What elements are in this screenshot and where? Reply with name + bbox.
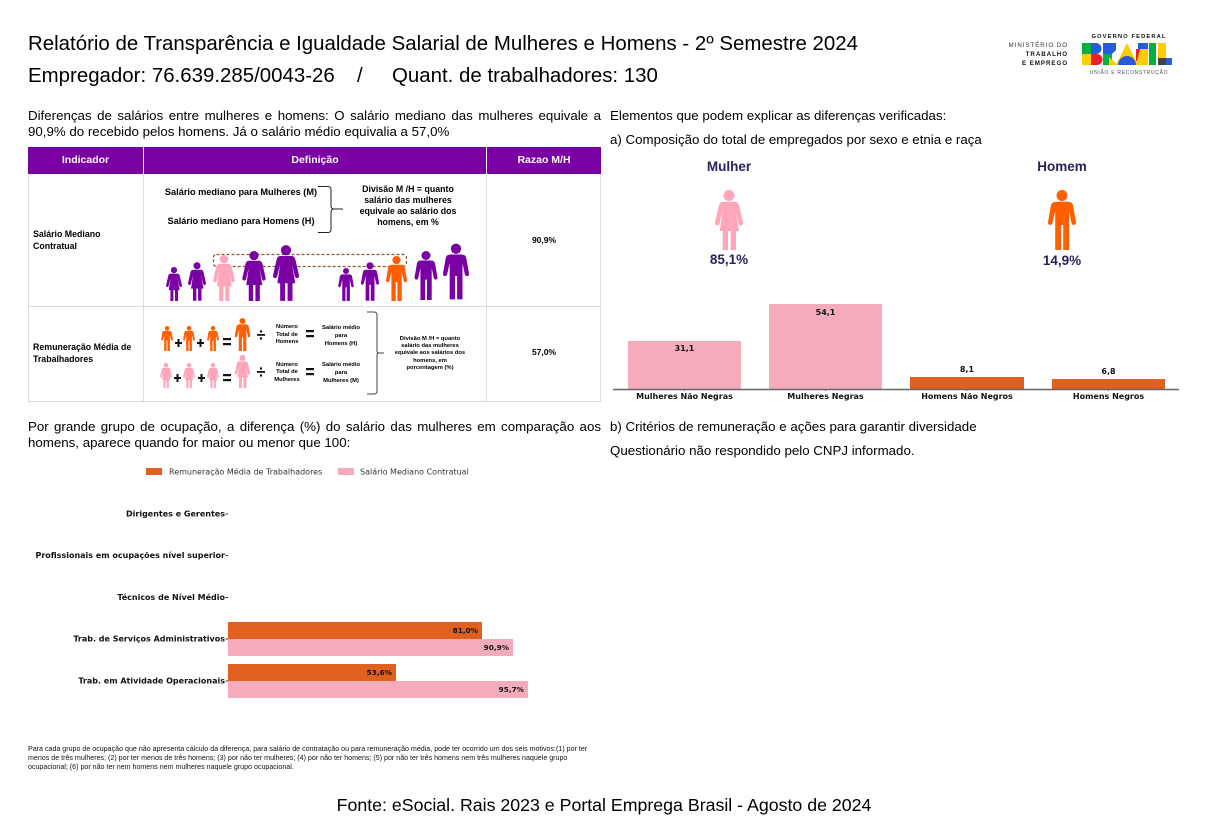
bar chart: occupation groups: 95,7% (499, 685, 525, 694)
definition: median salary formula: Salário mediano para Homens (H) (167, 216, 315, 226)
definition: average pay formula: Total de (276, 332, 298, 338)
definition: median salary formula: homens, em % (377, 216, 439, 226)
table header: Definição (291, 154, 339, 166)
logo: Ministério do Trabalho e Emprego: E EMPREGO (1022, 60, 1068, 67)
definition: average pay formula: para (335, 370, 347, 376)
bar chart: composition by sex and race (613, 304, 1179, 401)
bar chart: composition by sex and race: 6,8 (1101, 367, 1116, 376)
definition: average pay formula: Mulheres (274, 377, 300, 383)
section text: occupation groups: Por grande grupo de ocupação, a diferença (%) do salário das mulheres em comparação aos (28, 419, 601, 434)
row label: Remuneração Média de Trabalhadores: Remuneração Média de (33, 342, 131, 352)
bar chart: occupation groups: Dirigentes e Gerentes (126, 510, 225, 518)
section heading: explanatory elements (610, 108, 982, 147)
logo: Ministério do Trabalho e Emprego: TRABALHO (1026, 51, 1068, 58)
logo: Ministério do Trabalho e Emprego: MINISTÉRIO DO (1009, 42, 1068, 49)
definition: median salary formula (165, 184, 456, 233)
bar chart: composition by sex and race: Homens Não Negros (921, 392, 1013, 401)
title: Empregador: 76.639.285/0043-26 (28, 64, 335, 87)
bar chart: composition by sex and race: 54,1 (816, 308, 836, 317)
section text: remuneration criteria: Questionário não respondido pelo CNPJ informado. (610, 443, 915, 458)
panel: Homem share: 14,9% (1043, 253, 1081, 268)
footnote (28, 745, 587, 771)
footnote: ocupacional; (6) por não ter nem homens nem mulheres naquele grupo ocupacional. (28, 763, 294, 771)
definition: median salary formula: equivale ao salário dos (360, 206, 456, 216)
panel: Mulher share: Mulher (707, 159, 751, 174)
bar chart: occupation groups: Técnicos de Nível Médio (117, 592, 225, 602)
bar chart: occupation groups: Trab. em Atividade Operacionais (78, 676, 225, 686)
definition: average pay formula: Mulheres (M) (323, 378, 359, 384)
bar chart: occupation groups: 81,0% (453, 626, 479, 635)
logo: Ministério do Trabalho e Emprego (1009, 41, 1068, 67)
row label: Salário Mediano Contratual: Salário Mediano (33, 229, 100, 239)
definition: median salary formula: Salário mediano para Mulheres (M) (165, 187, 317, 197)
table header: Indicador (62, 154, 109, 166)
intro text: salary difference (28, 108, 602, 139)
title: / (357, 64, 363, 87)
definition: median salary formula: Divisão M /H = quanto (362, 184, 454, 194)
bar chart: occupation groups: 90,9% (484, 643, 510, 652)
legend (146, 466, 469, 476)
section heading: explanatory elements: Elementos que podem explicar as diferenças verificadas: (610, 108, 946, 123)
section text: occupation groups: homens, aparece quando for maior ou menor que 100: (28, 435, 350, 450)
section text: occupation groups (28, 419, 601, 450)
definition: average pay formula: homens, em (413, 358, 447, 364)
operators (174, 330, 314, 382)
panel: Homem share: Homem (1037, 159, 1087, 174)
table header (62, 154, 571, 166)
panel: Mulher share (707, 159, 751, 267)
definition: average pay formula: para (335, 333, 347, 339)
panel: Homem share (1037, 159, 1087, 268)
definition: median salary formula: salário das mulheres (364, 194, 452, 204)
bar chart: occupation groups: Profissionais em ocupações nível superior (35, 551, 225, 560)
definition: average pay formula: equivale aos salários dos (395, 350, 465, 356)
value: 57,0%: 57,0% (532, 347, 556, 357)
logo: Governo Federal Brasil (1082, 34, 1172, 76)
definition: average pay formula: Homens (H) (325, 341, 357, 347)
row label: Remuneração Média de Trabalhadores: Trabalhadores (33, 354, 93, 364)
bar chart: composition by sex and race: Homens Negros (1073, 392, 1144, 401)
icon row: people in order of salary (166, 244, 469, 301)
definition: average pay formula (160, 312, 465, 394)
definition: average pay formula: Total de (276, 369, 298, 375)
section text: remuneration criteria (610, 419, 977, 458)
section text: remuneration criteria: b) Critérios de remuneração e ações para garantir diversidade (610, 419, 977, 434)
legend: Salário Mediano Contratual (360, 468, 469, 476)
table header: Razao M/H (517, 154, 571, 166)
bar chart: composition by sex and race: Mulheres Negras (787, 392, 864, 401)
row label: Remuneração Média de Trabalhadores (33, 342, 131, 364)
panel: Mulher share: 85,1% (710, 252, 748, 267)
footnote: Para cada grupo de ocupação que não apresenta cálculo da diferença, para salário de contratação ou para remuneração média, pode ter ocorrido um dos seis motivos:(1) por ter (28, 745, 587, 753)
row label: Salário Mediano Contratual: Contratual (33, 241, 77, 251)
title: Quant. de trabalhadores: 130 (392, 64, 658, 87)
row label: Salário Mediano Contratual (33, 229, 100, 251)
definition: average pay formula: Salário médio (322, 362, 360, 368)
bar chart: composition by sex and race: Mulheres Não Negras (636, 392, 733, 401)
bar chart: composition by sex and race: 31,1 (675, 344, 695, 353)
legend: Remuneração Média de Trabalhadores (169, 466, 322, 476)
definition: average pay formula: Número (276, 324, 298, 330)
definition: average pay formula: Divisão M /H = quanto (400, 336, 460, 342)
footnote: menos de três mulheres; (2) por ter menos de três homens; (3) por não ter mulheres; (4) por não ter homens; (5) por não ter três homens nem três mulheres naquele grupo (28, 754, 567, 762)
bar chart: occupation groups: 53,6% (367, 668, 393, 677)
panel: indicator table (28, 147, 601, 402)
bar chart: occupation groups: Trab. de Serviços Administrativos (73, 634, 225, 644)
bar chart: occupation groups (35, 466, 528, 698)
definition: average pay formula: Salário médio (322, 325, 360, 331)
value: 90,9%: 90,9% (532, 235, 556, 245)
logo: Governo Federal Brasil: GOVERNO FEDERAL (1091, 34, 1167, 40)
definition: average pay formula: Homens (276, 339, 298, 345)
bar chart: composition by sex and race: 8,1 (960, 365, 975, 374)
definition: average pay formula: porcentagem (%) (406, 365, 454, 371)
intro text: salary difference: 90,9% do recebido pelos homens. Já o salário médio equivalia a 57,0% (28, 124, 449, 139)
section heading: explanatory elements: a) Composição do total de empregados por sexo e etnia e raça (610, 132, 982, 147)
title: Relatório de Transparência e Igualdade Salarial de Mulheres e Homens - 2º Semestre 2024 (28, 32, 858, 55)
definition: average pay formula: Número (276, 362, 298, 368)
definition: average pay formula: salário das mulheres (401, 343, 459, 349)
source line: Fonte: eSocial. Rais 2023 e Portal Emprega Brasil - Agosto de 2024 (337, 795, 871, 815)
intro text: salary difference: Diferenças de salários entre mulheres e homens: O salário mediano das mulheres equivale a (28, 108, 601, 123)
logo: Governo Federal Brasil: UNIÃO E RECONSTRUÇÃO (1090, 70, 1168, 76)
title (28, 32, 858, 87)
